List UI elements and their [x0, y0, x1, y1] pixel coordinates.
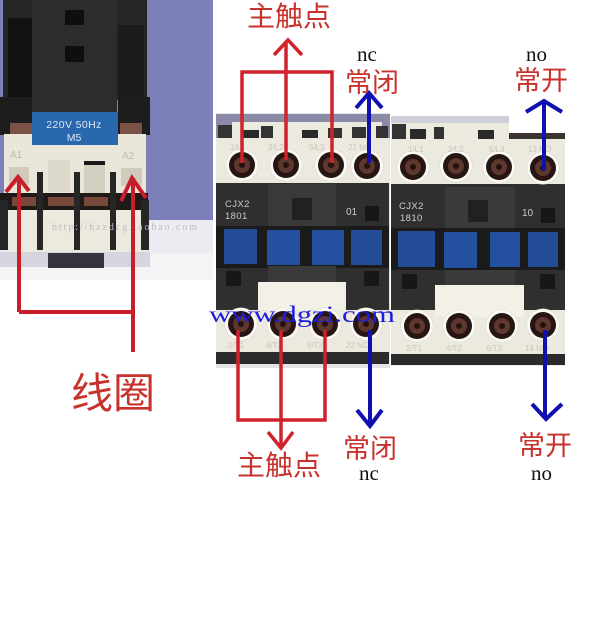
panel: CJX2 1801 contactor: 01: [346, 207, 358, 218]
panel: coil photo: [0, 0, 213, 280]
label: top nc: 常闭: [345, 68, 399, 98]
arrows: top main contacts: [242, 40, 332, 163]
panel: coil photo: A1: [10, 150, 23, 161]
panel: coil photo: http://hzzdcg.taobao.com: [52, 222, 197, 233]
label: top no: 常开: [514, 66, 568, 96]
panel: CJX2 1810 contactor: CJX2: [399, 201, 424, 212]
arrow: top nc: [356, 93, 382, 163]
panel: CJX2 1801 contactor: 6/T3: [307, 341, 324, 350]
label: bottom main contact: 主触点: [237, 450, 321, 481]
arrow: bottom no: [532, 330, 562, 419]
arrows: coil terminals: [6, 177, 146, 352]
panel: CJX2 1801 contactor: [216, 113, 390, 368]
arrow: bottom nc: [357, 330, 382, 426]
panel: CJX2 1801 contactor: 21 NC: [348, 143, 371, 152]
label: bottom no: [518, 431, 572, 485]
panel: CJX2 1801 contactor: 4/T2: [266, 341, 283, 350]
label: coil: 线圈: [71, 370, 155, 417]
label: top nc: [345, 42, 399, 98]
label: bottom no: 常开: [518, 431, 572, 461]
label: top no: [514, 42, 568, 96]
label: top no: no: [526, 42, 547, 66]
panel: CJX2 1810 contactor: 10: [522, 208, 534, 219]
panel: CJX2 1810 contactor: 2/T1: [406, 344, 423, 353]
panel: CJX2 1810 contactor: 1/L1: [408, 145, 424, 154]
arrow: top no: [526, 101, 562, 170]
panel: CJX2 1801 contactor: 1801: [225, 211, 248, 222]
panel: CJX2 1801 contactor: 2/T1: [228, 341, 245, 350]
panel: CJX2 1810 contactor: 14 NO: [525, 344, 548, 353]
panel: CJX2 1810 contactor: 1810: [400, 213, 423, 224]
label: top main contact: 主触点: [247, 1, 331, 32]
panel: CJX2 1810 contactor: 3/L2: [448, 145, 464, 154]
arrows: bottom main contacts: [238, 330, 325, 448]
panel: CJX2 1810 contactor: 13 NO: [528, 145, 551, 154]
panel: CJX2 1801 contactor: 5/L3: [309, 143, 325, 152]
label: top nc: nc: [357, 42, 377, 66]
panel: CJX2 1801 contactor: 22 NC: [346, 341, 369, 350]
panel: CJX2 1801 contactor: 3/L2: [268, 143, 284, 152]
watermark: www.dgzi.com: [209, 302, 395, 327]
panel: coil photo: A2: [122, 151, 135, 162]
label: 220V 50Hz M5: [32, 112, 118, 145]
label: bottom no: no: [531, 461, 552, 485]
label: 220V 50Hz M5: M5: [67, 132, 81, 144]
panel: CJX2 1810 contactor: 4/T2: [446, 344, 463, 353]
panel: CJX2 1810 contactor: [391, 116, 565, 366]
label: bottom nc: [343, 434, 397, 485]
panel: CJX2 1810 contactor: 5/L3: [489, 145, 505, 154]
panel: CJX2 1801 contactor: CJX2: [225, 199, 250, 210]
label: bottom nc: 常闭: [343, 434, 397, 464]
panel: CJX2 1810 contactor: 6/T3: [486, 344, 503, 353]
panel: CJX2 1801 contactor: 1/L1: [230, 143, 246, 152]
label: 220V 50Hz M5: 220V 50Hz: [46, 119, 102, 131]
label: bottom nc: nc: [359, 461, 379, 485]
